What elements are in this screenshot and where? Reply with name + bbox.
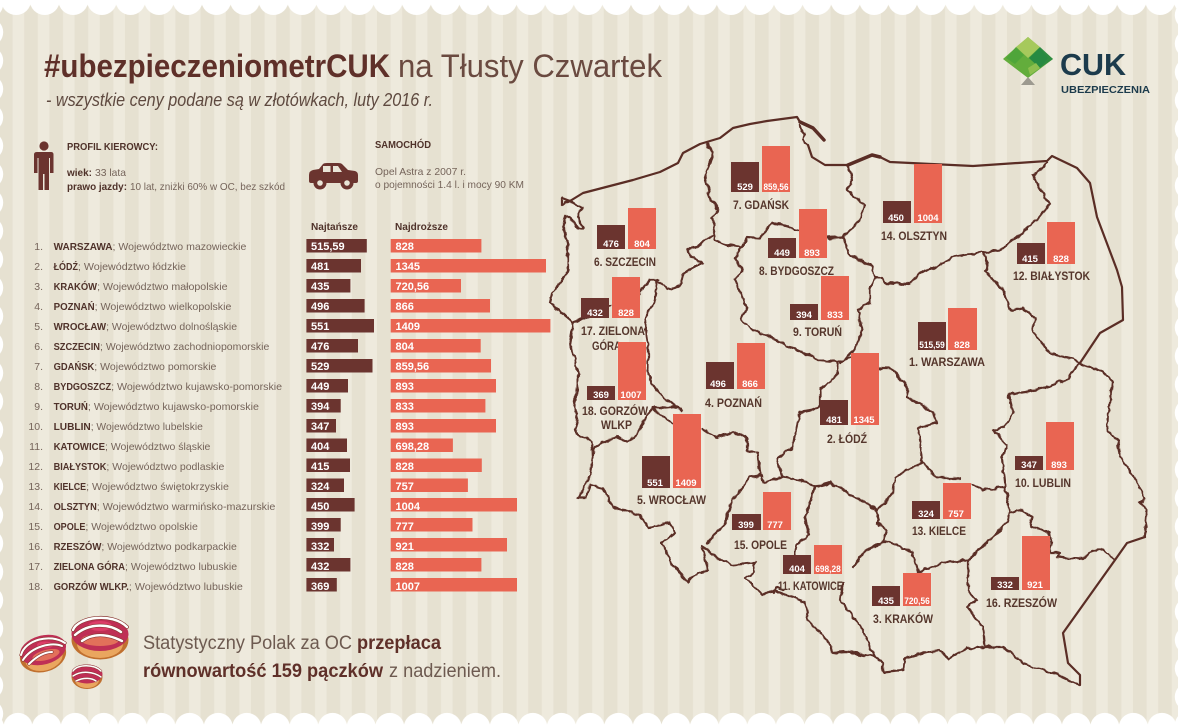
11. Katowice (778, 545, 843, 593)
title: na Tłusty Czwartek (398, 48, 663, 84)
18. Gorzów Wlkp.: 369 (593, 390, 609, 401)
4. Poznań (705, 343, 765, 410)
row 9: ; Województwo kujawsko-pomorskie (88, 401, 259, 413)
row 13: 757 (396, 481, 414, 493)
row 17: 17. (28, 561, 43, 573)
icon: doughnuts (16, 617, 129, 689)
row 12: 415 (311, 461, 329, 473)
row 14: 1004 (396, 501, 421, 513)
15. Opole: 399 (738, 520, 754, 531)
row 8: 8. (34, 381, 43, 393)
2. Łódź: 1345 (853, 415, 875, 426)
map: voivodeship borders of Poland (550, 117, 1147, 685)
14. Olsztyn (881, 164, 947, 243)
column heading: most expensive: Najdroższe (395, 221, 448, 233)
18. Gorzów Wlkp.: WLKP (601, 418, 632, 432)
3. Kraków: 720,56 (904, 596, 930, 606)
logo: CUK: CUK (1060, 47, 1127, 82)
callout: doughnut comparison: przepłaca (357, 633, 441, 654)
row 7: 529 (311, 361, 329, 373)
row 8: ; Województwo kujawsko-pomorskie (111, 381, 282, 393)
row 11: 698,28 (396, 441, 429, 453)
13. Kielce: 13. KIELCE (912, 524, 966, 538)
callout: doughnut comparison: z nadzieniem. (389, 661, 501, 682)
9. Toruń: 9. TORUŃ (793, 324, 842, 339)
3. Kraków (872, 573, 934, 626)
5. Wrocław: 551 (647, 478, 664, 489)
6. Szczecin: 804 (634, 239, 651, 250)
row 14: 14. (28, 501, 43, 513)
3. Kraków: 3. KRAKÓW (873, 611, 934, 626)
row 13: 13. (28, 481, 43, 493)
9. Toruń: 394 (796, 310, 813, 321)
15. Opole (732, 492, 791, 552)
row 8: BYDGOSZCZ (54, 381, 112, 393)
6. Szczecin (594, 208, 656, 269)
row 8: 893 (396, 381, 414, 393)
row 5 (34, 319, 550, 333)
row 9: 9. (34, 401, 43, 413)
row 9 (34, 399, 485, 413)
17. Zielona Góra (581, 277, 645, 353)
ranking list (28, 239, 550, 593)
subtitle: - wszystkie ceny podane są w złotówkach, luty 2016 r. (46, 90, 433, 110)
17. Zielona Góra: GÓRA (592, 338, 621, 353)
11. Katowice: 698,28 (815, 564, 841, 574)
13. Kielce: 324 (918, 509, 935, 520)
logo: CUK: UBEZPIECZENIA (1061, 85, 1150, 96)
car description: SAMOCHÓD (375, 138, 431, 151)
row 7: 7. (34, 361, 43, 373)
row 12: 828 (396, 461, 414, 473)
row 11: KATOWICE (54, 441, 105, 453)
row 13: KIELCE (54, 481, 86, 493)
row 4 (34, 299, 490, 313)
17. Zielona Góra: 17. ZIELONA (581, 324, 645, 338)
row 4: 866 (396, 301, 414, 313)
row 2 (34, 259, 546, 273)
icon: car (309, 163, 358, 190)
1. Warszawa (909, 308, 985, 369)
car description: Opel Astra z 2007 r. (375, 166, 466, 178)
driver profile: wiek: (66, 167, 92, 179)
title: #ubezpieczeniometrCUK (44, 48, 390, 84)
row 1: 1. (34, 241, 43, 253)
row 14: 450 (311, 501, 329, 513)
5. Wrocław (637, 414, 707, 507)
8. Bydgoszcz (759, 209, 834, 278)
row 15: 777 (396, 521, 414, 533)
row 7: ; Województwo pomorskie (94, 361, 217, 373)
10. Lublin: 893 (1051, 460, 1067, 471)
10. Lublin: 10. LUBLIN (1015, 476, 1071, 490)
row 17: 432 (311, 561, 329, 573)
driver profile: 33 lata (95, 167, 126, 179)
row 17 (28, 558, 481, 573)
row 5: 5. (34, 321, 43, 333)
row 10: ; Województwo lubelskie (91, 421, 203, 433)
row 11: 11. (29, 441, 43, 453)
17. Zielona Góra: 828 (618, 308, 634, 319)
row 17: ZIELONA GÓRA (54, 560, 125, 573)
row 15: ; Województwo opolskie (85, 521, 198, 533)
row 11: ; Województwo śląskie (105, 441, 211, 453)
row 6: ; Województwo zachodniopomorskie (100, 341, 269, 353)
row 16: 921 (396, 541, 414, 553)
4. Poznań: 496 (710, 379, 726, 390)
row 10: LUBLIN (54, 421, 91, 433)
row 10: 893 (396, 421, 414, 433)
6. Szczecin: 476 (603, 239, 619, 250)
16. Rzeszów: 921 (1027, 580, 1044, 591)
driver profile: PROFIL KIEROWCY: (67, 141, 158, 153)
row 11: 404 (311, 441, 330, 453)
18. Gorzów Wlkp. (582, 342, 649, 432)
row 6: 476 (311, 341, 329, 353)
row 10 (28, 419, 496, 433)
12. Białystok: 12. BIAŁYSTOK (1013, 269, 1090, 283)
row 16: 332 (311, 541, 329, 553)
row 1: ; Województwo mazowieckie (112, 241, 247, 253)
row 1: 828 (396, 241, 414, 253)
row 1: 515,59 (311, 241, 345, 253)
12. Białystok: 415 (1022, 254, 1039, 265)
10. Lublin (1015, 422, 1074, 490)
car description: o pojemności 1.4 l. i mocy 90 KM (375, 179, 524, 191)
7. Gdańsk (731, 146, 790, 212)
10. Lublin: 347 (1021, 460, 1037, 471)
2. Łódź (820, 353, 879, 446)
4. Poznań: 866 (742, 379, 758, 390)
row 5: 551 (311, 321, 329, 333)
row 15: OPOLE (54, 521, 85, 533)
row 12: ; Województwo podlaskie (106, 461, 224, 473)
1. Warszawa: 515,59 (919, 340, 945, 350)
row 17: ; Województwo lubuskie (125, 561, 237, 573)
16. Rzeszów: 16. RZESZÓW (986, 595, 1058, 610)
15. Opole: 777 (767, 520, 783, 531)
row 9: 833 (396, 401, 414, 413)
16. Rzeszów: 332 (997, 580, 1013, 591)
callout: doughnut comparison: równowartość 159 pączków (143, 661, 383, 682)
row 2: ; Województwo łódzkie (78, 261, 186, 273)
row 15: 15. (28, 521, 43, 533)
row 10: 10. (28, 421, 43, 433)
title (44, 48, 663, 84)
row 8 (34, 379, 496, 393)
row 4: 4. (34, 301, 43, 313)
row 3: KRAKÓW (54, 280, 97, 293)
row 3 (34, 279, 461, 293)
5. Wrocław: 5. WROCŁAW (637, 493, 707, 507)
doughnut medium (16, 630, 70, 678)
row 12: 12. (28, 461, 43, 473)
row 4: POZNAŃ (54, 300, 95, 313)
row 14 (28, 498, 517, 513)
15. Opole: 15. OPOLE (734, 538, 787, 552)
9. Toruń (790, 276, 849, 339)
row 5: ; Województwo dolnośląskie (106, 321, 237, 333)
row 6: SZCZECIN (54, 341, 100, 353)
row 3: 3. (34, 281, 43, 293)
2. Łódź: 481 (826, 415, 843, 426)
row 5: WROCŁAW (54, 321, 106, 333)
2. Łódź: 2. ŁÓDŹ (827, 431, 867, 446)
row 6 (34, 339, 481, 353)
row 13 (28, 478, 468, 493)
8. Bydgoszcz: 8. BYDGOSZCZ (759, 264, 834, 278)
row 18: 18. (28, 581, 43, 593)
row 12: BIAŁYSTOK (54, 461, 107, 473)
row 11 (29, 438, 453, 453)
row 2: ŁÓDŹ (54, 260, 78, 273)
row 17: 828 (396, 561, 414, 573)
row 1 (34, 239, 481, 253)
row 3: ; Województwo małopolskie (97, 281, 228, 293)
row 7: GDAŃSK (54, 360, 95, 373)
row 16: 16. (28, 541, 43, 553)
18. Gorzów Wlkp.: 18. GORZÓW (582, 403, 649, 418)
row 18: 369 (311, 581, 329, 593)
row 4: 496 (311, 301, 329, 313)
1. Warszawa: 828 (954, 340, 970, 351)
14. Olsztyn: 1004 (917, 213, 939, 224)
row 16 (28, 538, 507, 553)
driver profile: prawo jazdy: (67, 181, 127, 193)
13. Kielce (912, 483, 971, 538)
row 2: 2. (34, 261, 43, 273)
row 14: ; Województwo warmińsko-mazurskie (97, 501, 276, 513)
11. Katowice: 404 (789, 564, 806, 575)
17. Zielona Góra: 432 (587, 308, 603, 319)
logo: CUK (1003, 37, 1150, 96)
row 15: 399 (311, 521, 329, 533)
18. Gorzów Wlkp.: 1007 (620, 390, 642, 401)
9. Toruń: 833 (827, 310, 843, 321)
4. Poznań: 4. POZNAŃ (705, 395, 762, 410)
column heading: cheapest: Najtańsze (311, 221, 358, 233)
7. Gdańsk: 859,56 (764, 182, 788, 192)
row 14: OLSZTYN (54, 501, 97, 513)
row 2: 481 (311, 261, 329, 273)
8. Bydgoszcz: 449 (774, 248, 790, 259)
row 15 (28, 518, 472, 533)
13. Kielce: 757 (948, 509, 964, 520)
12. Białystok: 828 (1053, 254, 1069, 265)
row 9: 394 (311, 401, 330, 413)
6. Szczecin: 6. SZCZECIN (594, 255, 656, 269)
row 6: 804 (396, 341, 415, 353)
16. Rzeszów (986, 536, 1058, 610)
row 18 (28, 578, 517, 593)
14. Olsztyn: 450 (888, 213, 904, 224)
row 9: TORUŃ (54, 400, 88, 413)
row 1: WARSZAWA (54, 241, 113, 253)
row 10: 347 (311, 421, 329, 433)
icon: driver (34, 141, 54, 190)
5. Wrocław: 1409 (675, 478, 697, 489)
row 18: 1007 (396, 581, 420, 593)
row 4: ; Województwo wielkopolskie (95, 301, 232, 313)
row 18: ; Województwo lubuskie (129, 581, 243, 593)
row 16: ; Województwo podkarpackie (101, 541, 237, 553)
8. Bydgoszcz: 893 (804, 248, 820, 259)
row 13: 324 (311, 481, 330, 493)
callout: doughnut comparison: Statystyczny Polak za OC (143, 633, 352, 654)
doughnut large (72, 617, 128, 660)
driver profile (66, 141, 285, 193)
map: regional price bars (581, 146, 1090, 626)
row 16: RZESZÓW (54, 540, 101, 553)
7. Gdańsk: 7. GDAŃSK (733, 197, 789, 212)
row 5: 1409 (396, 321, 420, 333)
14. Olsztyn: 14. OLSZTYN (881, 229, 947, 243)
row 8: 449 (311, 381, 329, 393)
1. Warszawa: 1. WARSZAWA (909, 355, 985, 369)
11. Katowice: 11. KATOWICE (778, 579, 843, 593)
row 13: ; Województwo świętokrzyskie (86, 481, 229, 493)
3. Kraków: 435 (878, 596, 895, 607)
row 2: 1345 (396, 261, 420, 273)
row 6: 6. (34, 341, 43, 353)
row 12 (28, 458, 482, 473)
row 18: GORZÓW WLKP. (54, 580, 129, 593)
7. Gdańsk: 529 (737, 182, 753, 193)
car description (375, 138, 524, 191)
row 3: 720,56 (396, 281, 429, 293)
doughnut small (72, 664, 102, 689)
row 7: 859,56 (396, 361, 429, 373)
12. Białystok (1013, 222, 1090, 283)
row 7 (34, 359, 491, 373)
callout: doughnut comparison (143, 633, 501, 682)
row 3: 435 (311, 281, 329, 293)
driver profile: 10 lat, zniżki 60% w OC, bez szkód (130, 181, 285, 193)
